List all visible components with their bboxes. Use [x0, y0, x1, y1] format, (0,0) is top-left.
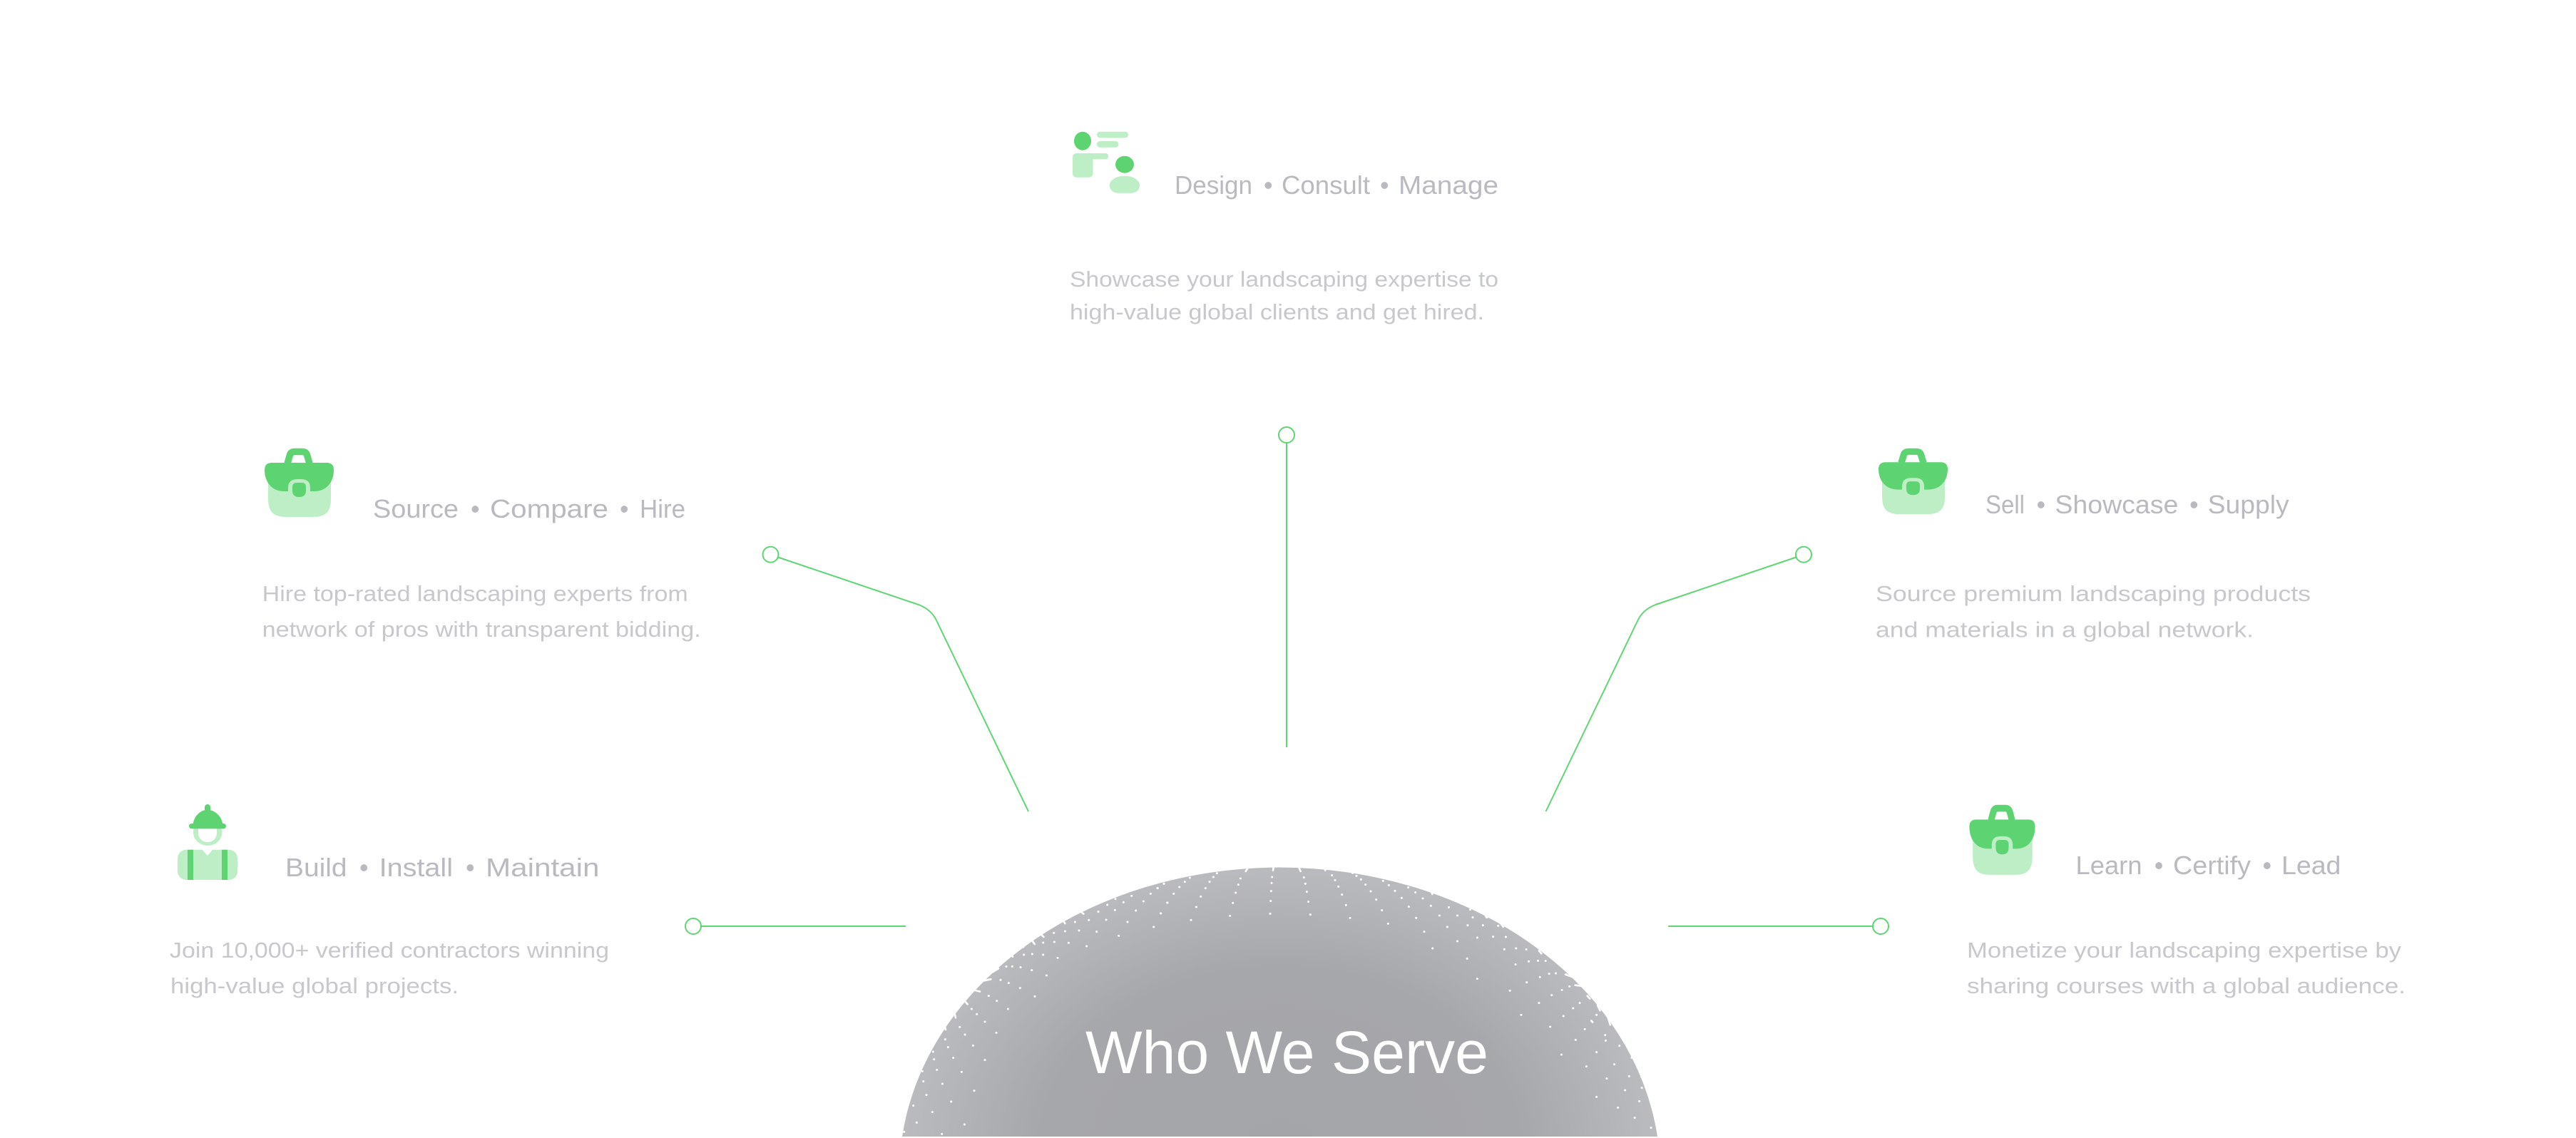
heading: Install: [379, 853, 453, 882]
heading: Hire: [640, 494, 685, 523]
heading: Consult: [1282, 170, 1370, 200]
description: Showcase your landscaping expertise to: [1070, 267, 1498, 292]
dome edge ticks left: [944, 911, 1083, 1030]
panel: dome: [902, 868, 1657, 1137]
description: Hire top-rated landscaping experts from: [262, 581, 688, 606]
connector: lower left: [685, 918, 906, 934]
heading: Showcase: [2055, 490, 2178, 519]
description: [1070, 267, 1498, 324]
description: and materials in a global network.: [1876, 617, 2254, 642]
heading: Maintain: [486, 853, 599, 882]
description: Join 10,000+ verified contractors winning: [170, 938, 609, 963]
heading: Design: [1175, 170, 1252, 200]
panel: source compare hire: [262, 452, 701, 642]
heading: Source: [373, 494, 459, 523]
heading: •: [2155, 851, 2163, 880]
connector: top center: [1279, 427, 1294, 747]
description: sharing courses with a global audience.: [1967, 973, 2406, 998]
heading: Certify: [2173, 851, 2251, 880]
icon: consultant and client: [1073, 132, 1140, 193]
heading: •: [620, 494, 629, 523]
panel: build install maintain: [170, 804, 609, 998]
heading: Supply: [2208, 490, 2289, 519]
heading: •: [1380, 170, 1389, 200]
heading: Manage: [1399, 170, 1498, 200]
description: high-value global clients and get hired.: [1070, 299, 1484, 324]
description: Monetize your landscaping expertise by: [1967, 938, 2402, 963]
heading: Sell: [1985, 490, 2025, 519]
description: [262, 581, 701, 642]
icon: briefcase: [1879, 451, 1948, 514]
heading: Build: [285, 853, 347, 882]
icon: worker: [178, 804, 237, 880]
description: [170, 938, 609, 998]
heading: •: [471, 494, 480, 523]
panel: learn certify lead: [1967, 809, 2406, 998]
description: network of pros with transparent bidding.: [262, 617, 701, 642]
icon: briefcase: [265, 452, 334, 517]
panel: design consult manage: [1070, 132, 1498, 324]
heading: Lead: [2281, 851, 2341, 880]
description: Source premium landscaping products: [1876, 581, 2311, 606]
panel: sell showcase supply: [1876, 451, 2311, 642]
heading: Compare: [490, 494, 608, 523]
heading: •: [359, 853, 369, 882]
heading: •: [466, 853, 475, 882]
heading: •: [2189, 490, 2199, 519]
connector: upper right: [1546, 547, 1811, 811]
dome shape: [902, 868, 1657, 1137]
connector: upper left: [763, 547, 1028, 811]
description: high-value global projects.: [170, 973, 459, 998]
description: [1876, 581, 2311, 642]
dome dots left: [904, 883, 1167, 1134]
title: Who We Serve: [1085, 1019, 1488, 1086]
dome dots right: [1447, 903, 1651, 1128]
heading: •: [2262, 851, 2271, 880]
heading: •: [1264, 170, 1273, 200]
connector: lower right: [1668, 918, 1888, 934]
dome dots top: [1157, 868, 1439, 948]
description: [1967, 938, 2406, 998]
heading: Learn: [2075, 851, 2142, 880]
heading: •: [2037, 490, 2045, 519]
icon: briefcase: [1969, 809, 2035, 875]
